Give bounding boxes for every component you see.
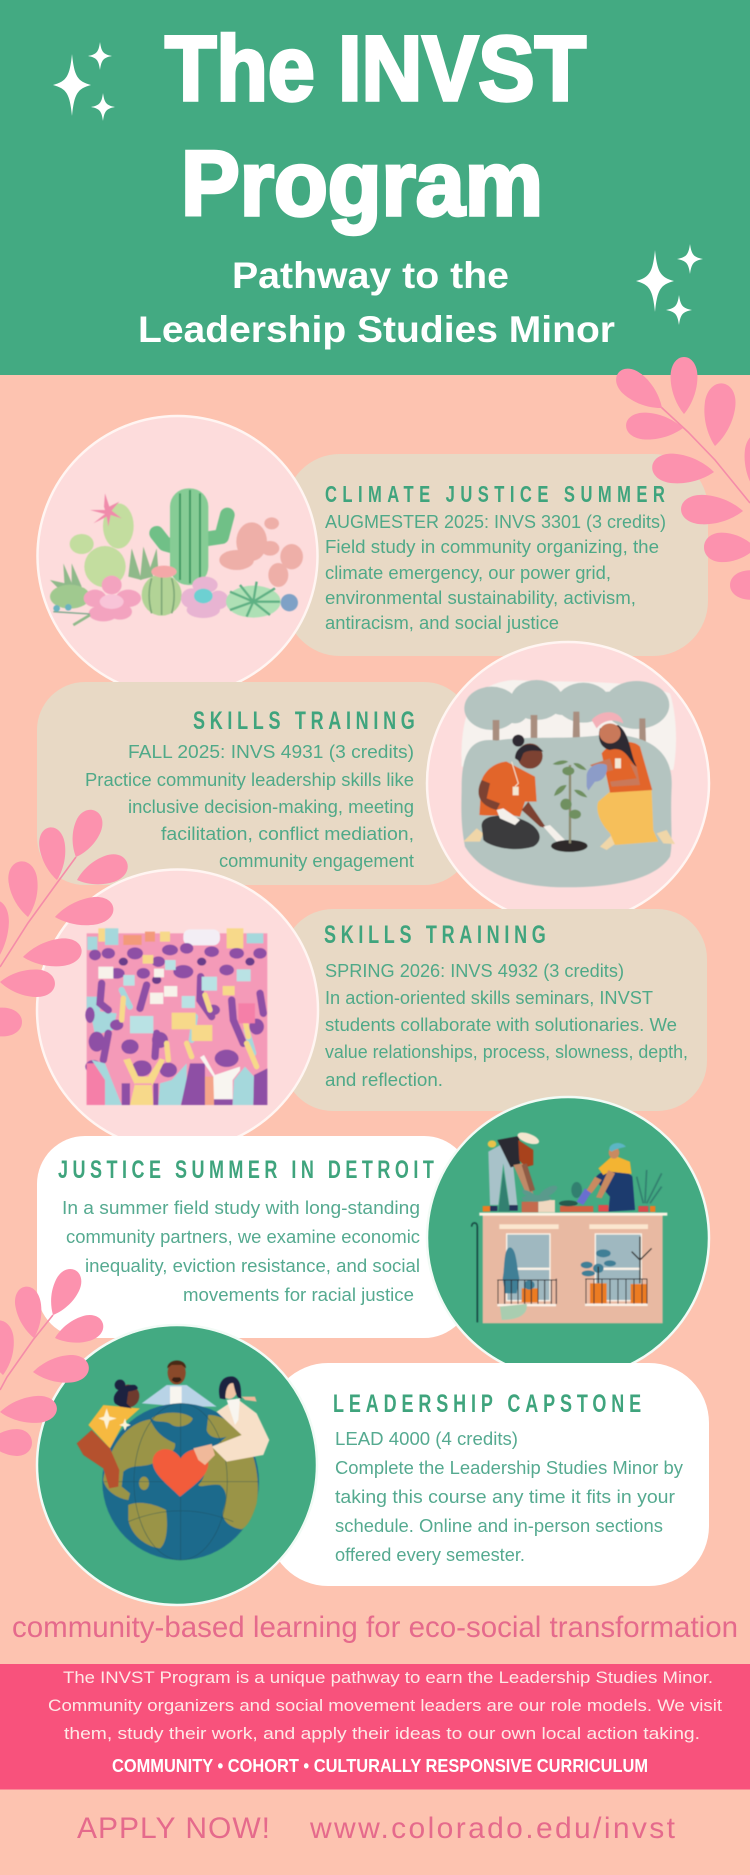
pill background (283, 909, 707, 1111)
text block: FALL 2025: INVS 4931 (3 credits) (128, 741, 414, 762)
text block: facilitation, conflict mediation, (161, 823, 414, 844)
heading: SKILLS TRAINING (193, 706, 415, 735)
subtitle: Pathway to the (232, 255, 509, 296)
text block (325, 960, 688, 1090)
text block: Practice community leadership skills like (85, 769, 414, 790)
call to action: www.colorado.edu/invst (309, 1812, 676, 1845)
heading: SKILLS TRAINING (324, 920, 546, 949)
image circle: rooftop garden (427, 1097, 709, 1379)
band values line: COMMUNITY • COHORT • CULTURALLY RESPONSIVE CURRICULUM (112, 1756, 648, 1776)
subtitle (138, 255, 615, 350)
pill background (285, 454, 708, 656)
illustration: protest crowd (85, 928, 267, 1105)
image circle: globe (37, 1325, 317, 1605)
text block: antiracism, and social justice (325, 612, 559, 633)
illustration: rooftop gardeners on a building (472, 1130, 667, 1323)
icon: sparkles left (53, 42, 115, 121)
decoration: pink leaf branch middle left (0, 806, 132, 1036)
text block: climate emergency, our power grid, (325, 562, 611, 583)
illustration: three people hugging a globe (77, 1360, 269, 1560)
panel: leadership capstone (37, 1325, 709, 1605)
band description: Community organizers and social movement leaders are our role models. We visit (48, 1696, 722, 1715)
decoration: pink leaf branch lower left (0, 1264, 107, 1456)
band description (48, 1668, 722, 1743)
text block: inclusive decision-making, meeting (128, 796, 414, 817)
text block: community partners, we examine economic (66, 1226, 420, 1247)
image circle: cacti (38, 416, 318, 696)
illustration: cacti and succulents (50, 488, 303, 625)
text block: LEAD 4000 (4 credits) (335, 1428, 518, 1449)
heading: JUSTICE SUMMER IN DETROIT (58, 1155, 434, 1184)
pill background (37, 682, 472, 885)
text block: In action-oriented skills seminars, INVST (325, 987, 653, 1008)
icon: sparkles right (636, 244, 703, 325)
title (165, 18, 586, 235)
text block: movements for racial justice (183, 1284, 414, 1305)
pink info band (0, 1664, 750, 1790)
text block: SPRING 2026: INVS 4932 (3 credits) (325, 960, 624, 981)
text block: Complete the Leadership Studies Minor by (335, 1457, 684, 1478)
text block: In a summer field study with long-standing (62, 1197, 420, 1218)
panel: climate justice summer (38, 416, 708, 696)
call to action: APPLY NOW! (77, 1812, 270, 1845)
header band (0, 0, 750, 375)
title: Program (181, 133, 543, 235)
text block: Field study in community organizing, the (325, 536, 659, 557)
pill background (37, 1136, 472, 1338)
title: The INVST (165, 18, 586, 120)
text block: community engagement (219, 850, 414, 871)
image circle: planting a tree (427, 642, 709, 924)
image circle: crowd (37, 870, 318, 1150)
heading: LEADERSHIP CAPSTONE (333, 1389, 641, 1418)
text block: inequality, eviction resistance, and social (85, 1255, 420, 1276)
text block: and reflection. (325, 1069, 443, 1090)
text block: AUGMESTER 2025: INVS 3301 (3 credits) (325, 511, 666, 532)
text block: students collaborate with solutionaries. We (325, 1014, 677, 1035)
text block (325, 511, 666, 633)
subtitle: Leadership Studies Minor (138, 309, 615, 350)
text block (62, 1197, 420, 1305)
text block: value relationships, process, slowness, depth, (325, 1041, 688, 1062)
band description: them, study their work, and apply their ideas to our own local action taking. (64, 1724, 700, 1743)
pill background (268, 1363, 709, 1586)
text block: offered every semester. (335, 1544, 525, 1565)
illustration: two people planting a tree (461, 680, 676, 887)
text block: taking this course any time it fits in your (335, 1486, 675, 1507)
call to action (77, 1812, 676, 1845)
panel: skills training spring (37, 870, 707, 1150)
text block (85, 741, 414, 871)
heading: CLIMATE JUSTICE SUMMER (325, 482, 665, 508)
panel: justice summer in detroit (37, 1097, 709, 1379)
panel: skills training fall (37, 642, 709, 924)
text block: environmental sustainability, activism, (325, 587, 636, 608)
band description: The INVST Program is a unique pathway to earn the Leadership Studies Minor. (63, 1668, 713, 1687)
decoration: pink leaf branch top right (610, 357, 750, 600)
text block (335, 1428, 684, 1565)
text block: schedule. Online and in-person sections (335, 1515, 663, 1536)
tagline: community-based learning for eco-social transformation (12, 1611, 738, 1644)
